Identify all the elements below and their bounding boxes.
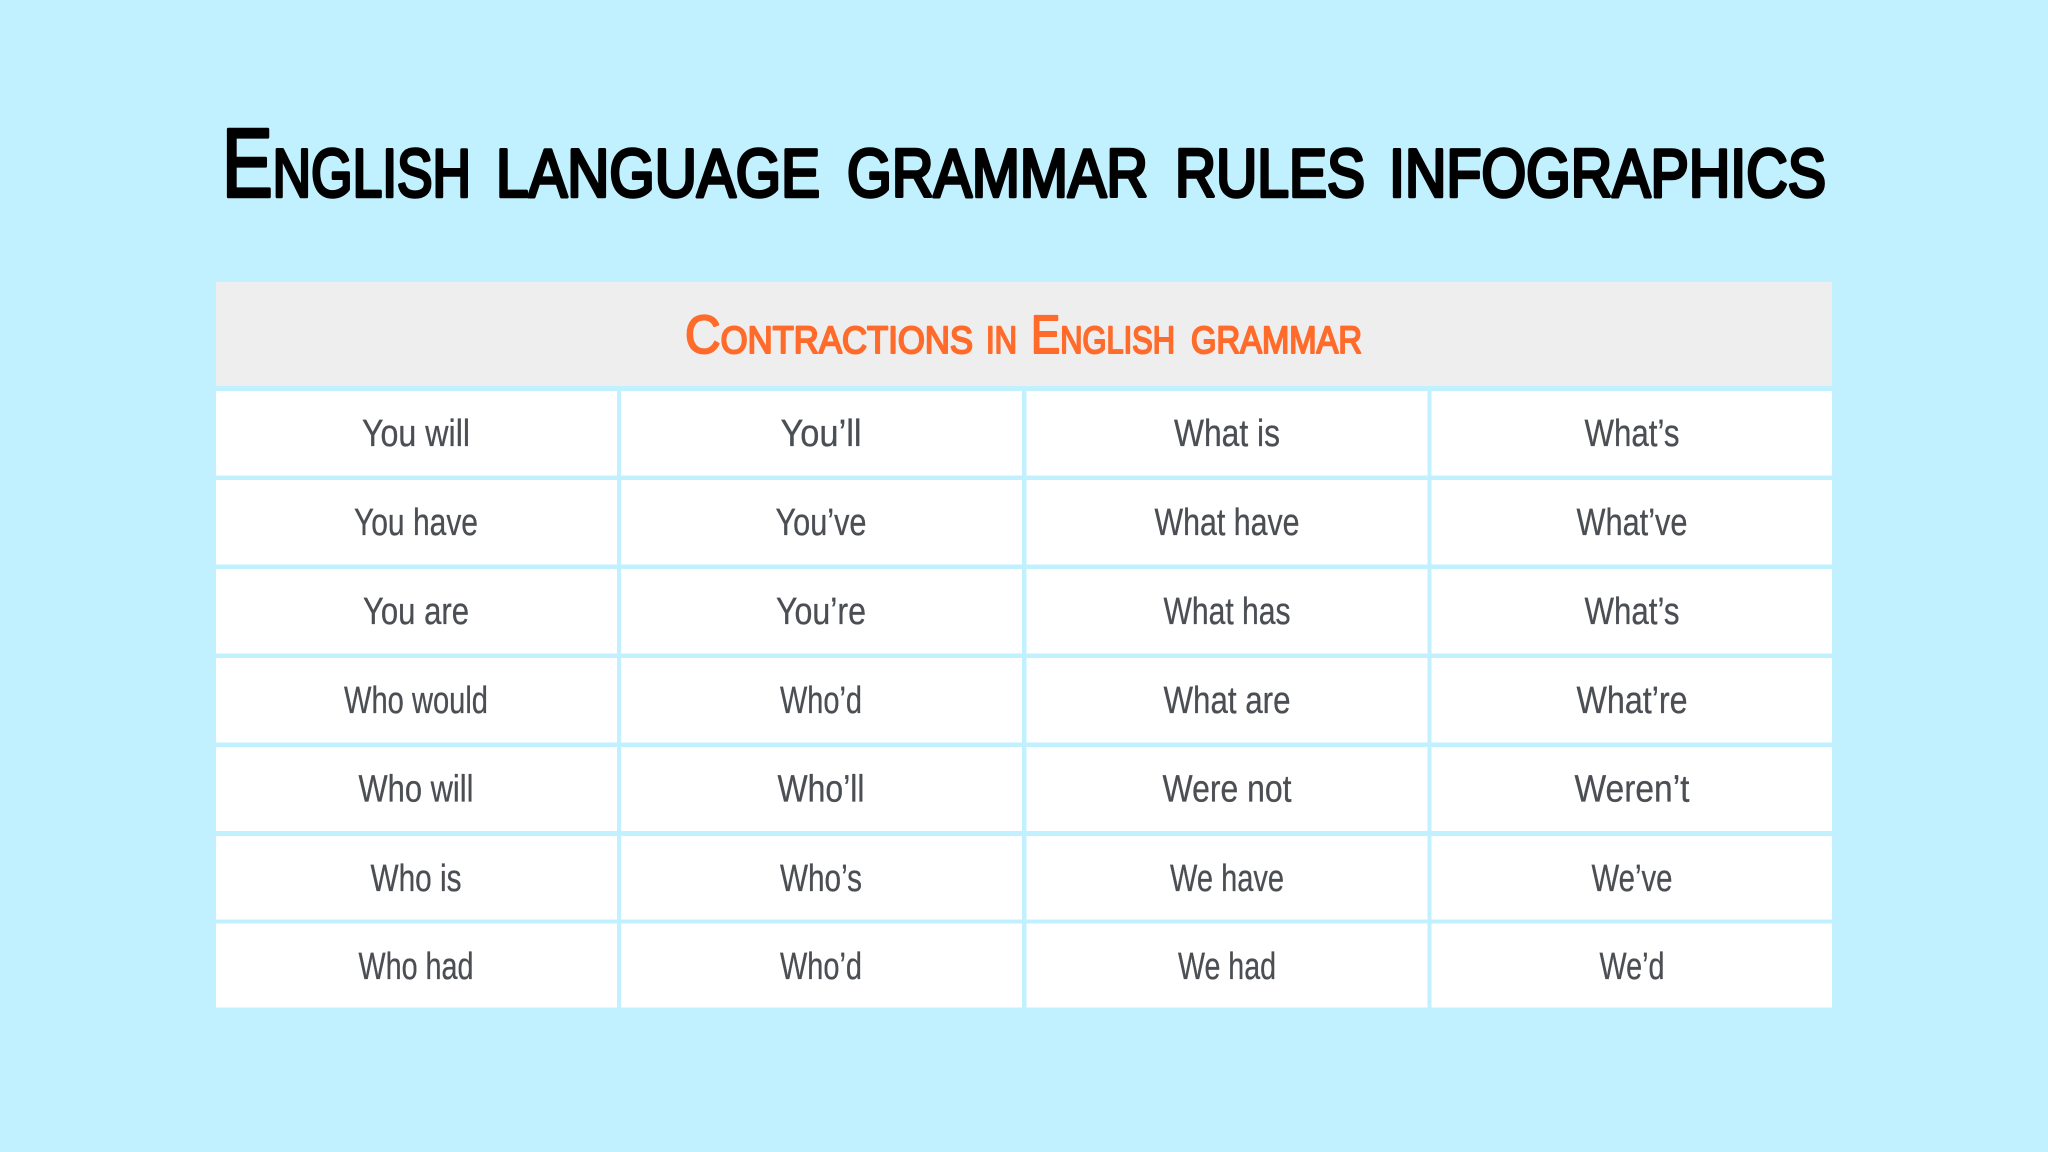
table header: Contractions [685,305,973,365]
row 1: What is [1174,413,1280,455]
table header: English [1031,305,1175,365]
title [222,108,1826,218]
row 3 [216,569,1832,654]
row 1: You’ll [780,413,862,455]
row 3: You are [363,591,469,633]
table header: in [986,305,1017,365]
row 3: You’re [776,591,866,633]
row 2: What have [1154,502,1300,544]
row 7: Who had [358,946,474,988]
row 4: Who would [344,680,488,722]
row 5 [216,747,1832,831]
row 4 [216,658,1832,742]
row 7: Who’d [780,946,862,988]
row 7: We had [1178,946,1276,988]
row 1 [216,391,1832,476]
row 5: Who will [358,768,474,810]
row 4: Who’d [780,680,862,722]
title: English [222,108,471,218]
title: grammar [847,108,1148,218]
row 6: Who is [370,858,462,900]
row 5: Weren’t [1574,768,1690,810]
row 5: Who’ll [778,768,864,810]
row 4: What’re [1576,680,1688,722]
row 2: You’ve [776,502,866,544]
row 2: You have [354,502,478,544]
row 3: What’s [1584,591,1680,633]
row 6: We’ve [1592,858,1672,900]
row 6: Who’s [780,858,862,900]
title: infographics [1389,108,1826,218]
row 3: What has [1164,591,1290,633]
row 4: What are [1164,680,1290,722]
row 2 [216,480,1832,564]
title: language [496,108,820,218]
row 7: We’d [1600,946,1664,988]
panel: contractions table [216,282,1832,1008]
table header: grammar [1191,305,1362,365]
row 2: What’ve [1576,502,1688,544]
title: rules [1175,108,1365,218]
row 1: What’s [1584,413,1680,455]
row 1: You will [362,413,470,455]
table header [216,282,1832,386]
row 6: We have [1170,858,1284,900]
row 5: Were not [1162,768,1292,810]
row 7 [216,924,1832,1008]
row 6 [216,836,1832,920]
